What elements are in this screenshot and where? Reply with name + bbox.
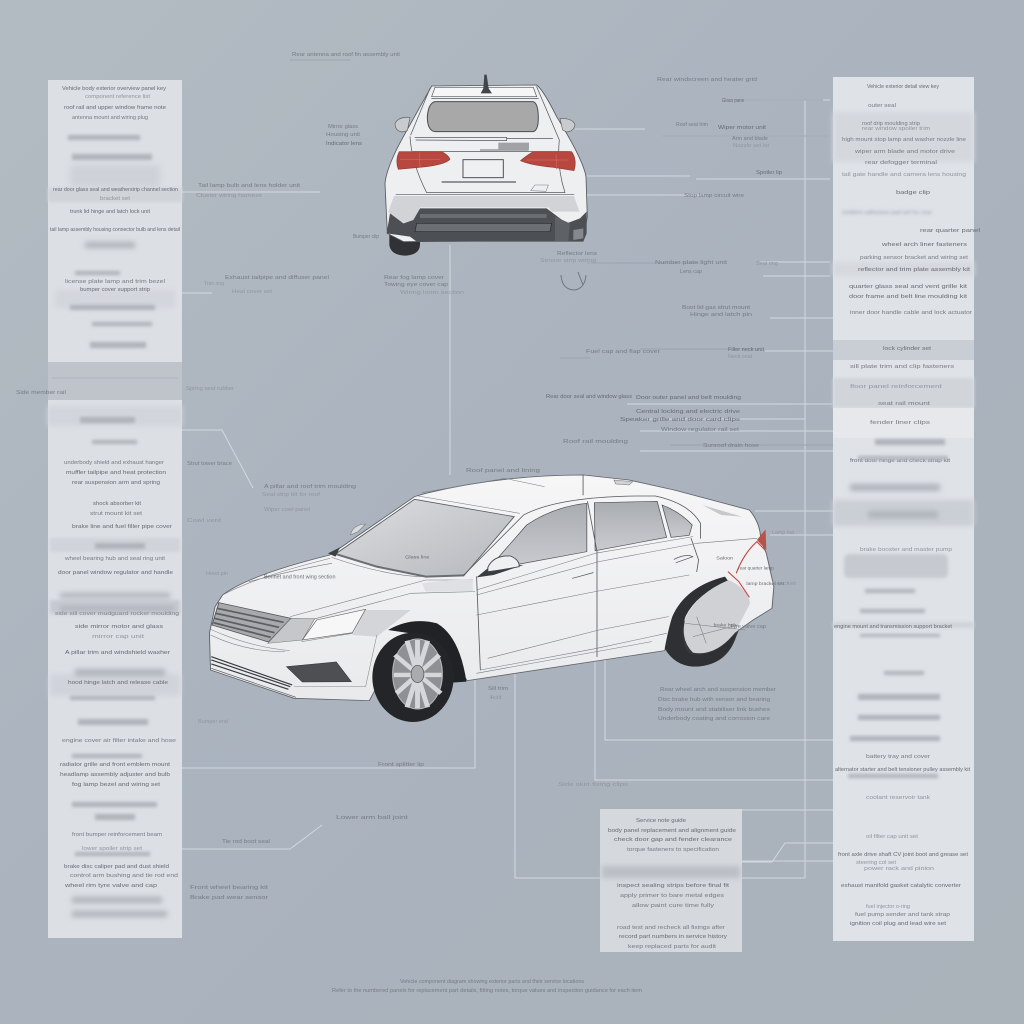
rear body — [385, 85, 587, 242]
left column sharp text: side sill cover mudguard rocker moulding — [55, 611, 179, 617]
right column sharp text: emblem adhesive pad set for rear — [842, 210, 932, 216]
right column sharp text: outer seal — [868, 103, 896, 109]
rear tyre shadow — [667, 577, 749, 667]
right column sharp text: seat rail mount — [878, 401, 931, 407]
icon: small sketch glyph — [561, 272, 586, 290]
right column sharp text: brake booster and master pump — [860, 547, 952, 553]
right column sharp text: front door hinge and check strap kit — [850, 458, 950, 464]
left column sharp text: headlamp assembly adjuster and bulb — [60, 772, 170, 778]
floating labels: Heat cover set — [232, 289, 272, 295]
right column sharp text: fuel pump sender and tank strap — [855, 912, 950, 918]
left column sharp text: underbody shield and exhaust hanger — [64, 460, 164, 466]
right column blurred text — [848, 439, 948, 778]
panel: centre bottom note: check door gap and fender clearance — [614, 837, 732, 843]
right column sharp text: ignition coil plug and lead wire set — [850, 921, 947, 927]
headlight — [268, 618, 315, 643]
floating labels: Side member rail — [16, 390, 66, 396]
right column sharp text: high mount stop lamp and washer nozzle line — [842, 137, 966, 143]
right column sharp text: badge clip — [896, 190, 930, 196]
panel: centre bottom note: Service note guide — [636, 818, 686, 824]
floating labels: Glass pane — [722, 98, 744, 104]
panel: centre bottom note: body panel replacement and alignment guide — [608, 828, 736, 834]
right column sharp text: oil filter cap unit set — [866, 834, 918, 840]
grille — [212, 603, 291, 642]
right column sharp text: rear defogger terminal — [865, 160, 937, 166]
left column sharp text: rear door glass seal and weatherstrip channel section — [53, 187, 178, 193]
panel: centre bottom note: road test and recheck all fixings after — [617, 925, 725, 931]
left column sharp text: A pillar trim and windshield washer — [65, 650, 170, 656]
left column sharp text: fog lamp bezel and wiring set — [72, 782, 161, 788]
right column sharp text: fender liner clips — [870, 420, 930, 426]
right column sharp text: alternator starter and belt tensioner pulley assembly kit — [835, 767, 970, 773]
floating labels: Lower arm ball joint — [336, 815, 409, 821]
left column sharp text: rear suspension arm and spring — [72, 480, 160, 486]
panel: centre bottom note: allow paint cure time fully — [632, 903, 714, 909]
right column sharp text: front axle drive shaft CV joint boot and grease set — [838, 852, 968, 858]
left column sharp text: engine cover air filter intake and hose — [62, 738, 176, 744]
panel: centre bottom note: record part numbers in service history — [619, 934, 727, 940]
floating labels: Sensor strip wiring — [540, 258, 596, 264]
car: side view — [209, 475, 785, 722]
left column sharp text: bracket set — [100, 196, 130, 202]
right column sharp text: coolant reservoir tank — [866, 795, 930, 801]
left column sharp text: brake disc caliper pad and dust shield — [64, 864, 169, 870]
floating labels: Towing eye cover cap — [384, 282, 448, 288]
mirrors — [395, 117, 575, 132]
right column sharp text: battery tray and cover — [866, 754, 930, 760]
floating labels: Hood pin — [206, 571, 228, 577]
floating labels: Roof panel and lining — [466, 468, 540, 474]
floating labels: Front wheel bearing kit — [190, 885, 269, 891]
left column sharp text: radiator grille and front emblem mount — [60, 762, 171, 768]
floating labels: Cluster wiring harness — [196, 193, 262, 199]
floating labels: Spoiler lip — [756, 170, 782, 176]
floating labels: Lens cap — [680, 269, 702, 275]
left column sharp text: hood hinge latch and release cable — [68, 680, 168, 686]
floating labels: Housing unit — [326, 132, 360, 138]
floating labels: Seal strip kit for roof — [262, 492, 321, 498]
hood lines — [223, 557, 475, 623]
floating labels: Indicator lens — [326, 141, 362, 147]
right column sharp text: power rack and pinion — [864, 866, 934, 872]
floating labels: Central locking and electric drive — [636, 409, 740, 415]
door handles — [573, 555, 693, 578]
floating labels: Spring seat rubber — [186, 386, 234, 392]
floating labels: Strut tower brace — [187, 461, 232, 467]
floating labels: Front splitter lip — [378, 762, 424, 768]
right column sharp text: floor panel reinforcement — [850, 384, 943, 390]
left column sharp text: mirror cap unit — [92, 634, 145, 640]
car: side view: lamp bracket set — [746, 581, 785, 587]
windshield — [335, 499, 514, 577]
right column sharp text: tail gate handle and camera lens housing — [842, 172, 966, 178]
floating labels: Body mount and stabiliser link bushes — [658, 707, 770, 713]
floating labels: Hinge and latch pin — [690, 312, 752, 318]
right column sharp text: wiper arm blade and motor drive — [854, 149, 955, 155]
floating labels: Fuel cap and flap cover — [586, 349, 660, 355]
left column sharp text — [50, 86, 180, 889]
rear tyres — [389, 233, 420, 256]
floating labels: Brake pad wear sensor — [190, 895, 268, 901]
right column sharp text: fuel injector o-ring — [866, 904, 910, 910]
floating labels: Bracket — [772, 581, 797, 587]
floating labels: Rear windscreen and heater grid — [657, 77, 757, 83]
floating labels: Roof seal trim — [676, 122, 708, 128]
red tail accents — [728, 529, 766, 597]
antenna — [481, 75, 492, 93]
floating labels: Boot lid gas strut mount — [682, 305, 751, 311]
floating labels: Side skirt fixing clips — [558, 782, 628, 788]
licence plate — [463, 160, 503, 178]
left column sharp text: control arm bushing and tie rod end — [70, 873, 178, 879]
floating labels: Window regulator rail set — [661, 427, 740, 433]
right column sharp text: quarter glass seal and vent grille kit — [849, 284, 968, 290]
left column sharp text: strut mount kit set — [90, 511, 143, 517]
right column sharp text: steering col set — [856, 860, 896, 866]
floating labels: Filler neck unit — [728, 347, 764, 353]
right column sharp text: exhaust manifold gasket catalytic converter — [841, 883, 961, 889]
side labels on the car: Bonnet and front wing section — [264, 575, 336, 580]
right column sharp text: lock cylinder set — [883, 346, 932, 352]
floating labels: Cowl vent — [187, 518, 222, 524]
left column sharp text: bumper cover support strip — [80, 287, 150, 293]
floating labels: Reflector lens — [557, 251, 597, 257]
left column sharp text: door panel window regulator and handle — [58, 570, 173, 576]
floating labels: Door outer panel and belt moulding — [636, 395, 741, 401]
lower grille — [211, 657, 296, 697]
left column sharp text: muffler tailpipe and heat protection — [66, 470, 166, 476]
right column sharp text: engine mount and transmission support bracket — [834, 624, 952, 630]
roof shading — [614, 480, 633, 485]
floating labels: Underbody coating and corrosion care — [658, 716, 770, 722]
floating labels: Trim ring — [204, 281, 224, 287]
floating labels: Stop lamp circuit wire — [684, 193, 744, 199]
floating labels: Tail lamp bulb and lens holder unit — [198, 183, 301, 189]
far side mirror — [351, 524, 366, 535]
side windows — [490, 503, 587, 567]
floating labels: Wiper cowl panel — [264, 507, 310, 513]
floating labels: Exhaust tailpipe and diffuser panel — [225, 275, 329, 281]
left column sharp text: antenna mount and wiring plug — [72, 115, 148, 121]
floating labels: Neck seal — [728, 354, 752, 360]
left column sharp text: lower spoiler strip set — [82, 846, 142, 852]
floating labels: Rear door seal and window glass — [546, 394, 632, 400]
left column sharp text: component reference list — [85, 94, 150, 100]
car: rear view — [385, 75, 587, 256]
floating labels: Rear wheel arch and suspension member — [660, 687, 776, 693]
right column sharp text: parking sensor bracket and wiring set — [860, 255, 969, 261]
fog lamp — [287, 662, 351, 682]
rear window — [427, 102, 538, 132]
connector lines — [182, 100, 835, 878]
left column sharp text: front bumper reinforcement beam — [72, 832, 162, 838]
floating labels: Arm and blade — [732, 136, 768, 142]
right column sharp text: rear window spoiler trim — [862, 126, 930, 132]
car: side view: rear quarter lamp — [738, 566, 774, 571]
right column sharp text: reflector and trim plate assembly kit — [858, 267, 971, 273]
left column sharp text: side mirror motor and glass — [75, 624, 163, 630]
left column sharp text: shock absorber kit — [93, 501, 141, 507]
floating labels: Speaker grille and door card clips — [620, 417, 740, 423]
floating labels: Tyre valve cap — [730, 624, 766, 630]
floating labels: Bumper clip — [353, 234, 379, 240]
footer caption: Vehicle component diagram showing exterior parts and their service locations — [400, 979, 584, 985]
right column sharp text: wheel arch liner fasteners — [881, 242, 967, 248]
right column sharp text: roof drip moulding strip — [862, 121, 920, 127]
floating labels: Sunroof drain hose — [703, 443, 759, 449]
panel: centre bottom note: keep replaced parts for audit — [628, 944, 717, 950]
front wheel — [372, 621, 466, 722]
panel: centre bottom note: torque fasteners to specification — [627, 847, 719, 853]
car body — [209, 475, 774, 701]
left column sharp text: wheel rim tyre valve and cap — [64, 883, 157, 889]
right column sharp text: Vehicle exterior detail view key — [867, 84, 939, 90]
floating labels: A pillar and roof trim moulding — [264, 484, 356, 490]
left column sharp text: tail lamp assembly housing connector bulb and lens detail — [50, 227, 180, 233]
floating labels: Roof rail moulding — [563, 439, 628, 445]
floating labels: Sill trim — [488, 686, 508, 692]
left column blurred text — [60, 135, 175, 917]
left column sharp text: license plate lamp and trim bezel — [65, 279, 165, 285]
left column sharp text: trunk lid hinge and latch lock unit — [70, 209, 150, 215]
floating labels: Nozzle set kit — [733, 143, 769, 149]
floating labels: Mirror glass — [328, 124, 358, 130]
panel: right column — [833, 77, 980, 941]
floating labels: Wiper motor unit — [718, 125, 767, 131]
right column sharp text: rear quarter panel — [920, 228, 980, 234]
car: side view: Saloon — [716, 556, 733, 561]
panel: centre bottom note: inspect sealing strips before final fit — [617, 883, 730, 889]
car: side view: brake hub — [714, 623, 736, 629]
floating labels: Rear fog lamp cover — [384, 275, 444, 281]
side mirror — [477, 556, 524, 577]
panel: left column — [48, 80, 182, 938]
floating labels: Wiring loom section — [400, 290, 464, 296]
rear wheel — [665, 577, 750, 667]
floating labels — [16, 52, 797, 901]
badge — [480, 143, 529, 151]
left column sharp text: Vehicle body exterior overview panel key — [62, 86, 166, 92]
left column sharp text: wheel bearing hub and seal ring unit — [64, 556, 165, 562]
right column sharp text: inner door handle cable and lock actuator — [850, 310, 972, 316]
footer caption — [332, 979, 642, 994]
floating labels: Tie rod boot seal — [222, 839, 270, 845]
floating labels: Disc brake hub with sensor and bearing — [658, 697, 770, 703]
tail lights — [397, 152, 450, 169]
floating labels: Rear antenna and roof fin assembly unit — [292, 52, 400, 58]
panel: centre bottom note: apply primer to bare metal edges — [620, 893, 724, 899]
left column sharp text: roof rail and upper window frame note — [64, 105, 166, 111]
floating labels: Seal ring — [756, 261, 778, 267]
panel: centre bottom note — [600, 809, 742, 952]
floating labels: Number plate light unit — [655, 260, 728, 266]
right column sharp text: door frame and belt line moulding kit — [849, 294, 968, 300]
floating labels: Bumper end — [198, 719, 228, 725]
right column sharp text: sill plate trim and clip fasteners — [850, 364, 954, 370]
left column sharp text: brake line and fuel filler pipe cover — [72, 524, 172, 530]
floating labels: kit — [490, 695, 503, 701]
rear bumper — [388, 196, 579, 223]
car: side view: Glass line — [405, 555, 430, 561]
floating labels: Lamp nut — [772, 530, 794, 536]
right column sharp text — [834, 84, 980, 927]
footer caption: Refer to the numbered panels for replacement part details, fitting notes, torque values and inspection guidance for each item — [332, 988, 642, 994]
